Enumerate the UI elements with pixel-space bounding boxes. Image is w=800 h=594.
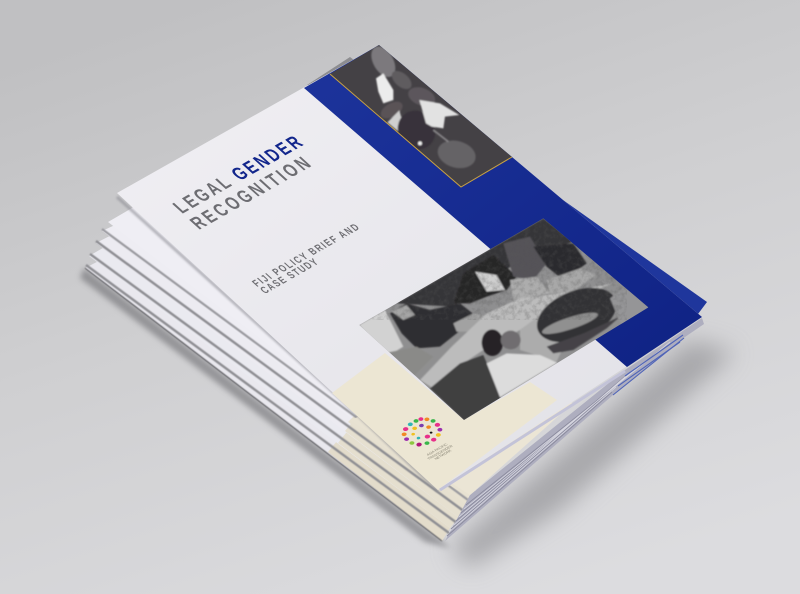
- booklet 2: [96, 195, 480, 512]
- cover: cream block: [332, 353, 557, 490]
- subtitle line 1: FIJI POLICY BRIEF AND: [250, 222, 363, 289]
- subtitle: [250, 222, 363, 296]
- top booklet cover: [117, 40, 702, 490]
- dark round basket at right: [536, 287, 616, 343]
- booklet 5 (bottom of stack): [85, 230, 470, 541]
- cast shadow on surface: [80, 268, 735, 568]
- booklet page edges on the right side: [445, 318, 704, 541]
- foreground seated woman: [430, 355, 502, 421]
- title line: LEGAL GENDER: LEGAL GENDER: [168, 132, 307, 217]
- large photo of group weaving: [353, 213, 653, 427]
- mat: [420, 283, 613, 388]
- logo: colourful dot ring: [400, 416, 454, 461]
- subtitle line 2: CASE STUDY: [258, 257, 322, 296]
- cover: blue band: [304, 45, 702, 367]
- left seated people: [390, 303, 477, 348]
- gold rule around top photo: [330, 74, 512, 187]
- booklet 4: [86, 215, 475, 533]
- title line: RECOGNITION: RECOGNITION: [185, 153, 316, 233]
- top photo of flowers: [330, 45, 512, 186]
- logo text: ASIA PACIFIC: [426, 442, 449, 457]
- cover: page edge highlight: [440, 371, 625, 490]
- central people: [453, 255, 517, 303]
- title: [168, 132, 316, 233]
- wall: [397, 218, 573, 307]
- blue cover edge lines: [613, 335, 684, 395]
- right person: [610, 287, 648, 326]
- booklet 1: second from top: [102, 57, 707, 500]
- logo text: TRANSGENDER: [427, 444, 454, 461]
- cover: white base: [117, 45, 702, 490]
- booklet 3: [90, 205, 478, 523]
- logo text: NETWORK: [434, 449, 453, 461]
- left pale area: [359, 310, 403, 357]
- cream flap of second booklet: [450, 398, 573, 495]
- shadow under top booklet spine: [117, 197, 438, 491]
